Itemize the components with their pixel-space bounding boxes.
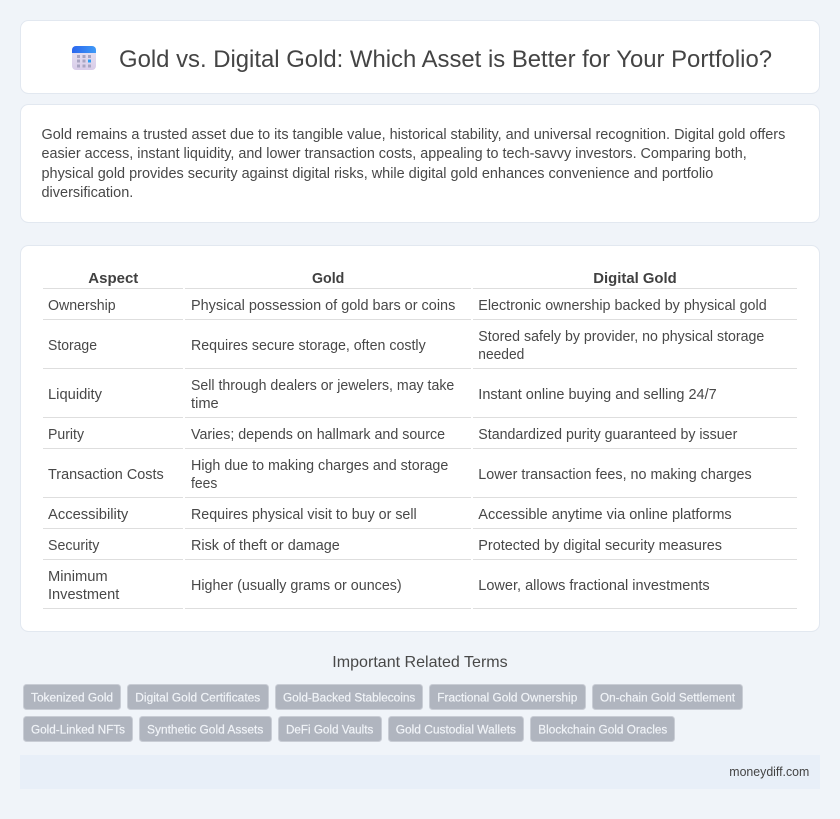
table header row: Digital Gold xyxy=(593,270,677,287)
tag: tokenized gold xyxy=(24,684,120,710)
tag: tokenized gold: Tokenized Gold xyxy=(31,690,113,704)
row: minimum investment xyxy=(48,569,710,603)
row: ownership: Physical possession of gold bars or coins xyxy=(191,298,455,314)
row: minimum investment: Lower, allows fractional investments xyxy=(478,578,710,594)
tag: gold-backed stablecoins: Gold-Backed Stablecoins xyxy=(283,690,415,704)
row: accessibility xyxy=(48,507,732,523)
row: security: Security xyxy=(48,538,100,554)
tag: digital gold certificates xyxy=(128,684,268,710)
row: transaction costs: High due to making charges and storage xyxy=(191,458,448,474)
footer source text: moneydiff.com xyxy=(729,765,809,779)
table header row: Gold xyxy=(312,270,344,287)
icon: calendar xyxy=(72,46,96,70)
row: storage xyxy=(48,329,764,363)
row: security: Risk of theft or damage xyxy=(191,538,340,554)
related terms tags xyxy=(24,684,742,742)
row: minimum investment: Higher (usually grams or ounces) xyxy=(191,578,402,594)
row: purity: Varies; depends on hallmark and source xyxy=(191,427,445,443)
row: liquidity xyxy=(48,378,717,412)
table header row xyxy=(88,270,677,287)
row: liquidity: Instant online buying and selling 24/7 xyxy=(478,387,717,403)
row: security xyxy=(48,538,722,554)
tag: on-chain gold settlement xyxy=(592,684,742,710)
heading: important related terms: Important Related Terms xyxy=(332,654,508,671)
row: accessibility: Accessibility xyxy=(48,507,129,523)
row: liquidity: time xyxy=(191,396,219,412)
tag: synthetic gold assets: Synthetic Gold Assets xyxy=(147,722,263,736)
panel: comparison table xyxy=(20,246,820,632)
tag: defi gold vaults xyxy=(278,716,382,742)
row: storage: needed xyxy=(478,347,524,363)
row: liquidity: Sell through dealers or jewelers, may take xyxy=(191,378,454,394)
intro paragraph: diversification. xyxy=(42,185,133,201)
tag: defi gold vaults: DeFi Gold Vaults xyxy=(286,722,373,736)
tag: fractional gold ownership xyxy=(430,684,586,710)
row: transaction costs: fees xyxy=(191,476,217,492)
row: security: Protected by digital security measures xyxy=(478,538,722,554)
row: purity: Purity xyxy=(48,427,85,443)
tag: gold custodial wallets xyxy=(388,716,524,742)
tag: blockchain gold oracles: Blockchain Gold Oracles xyxy=(538,722,667,736)
intro paragraph: easier access, instant liquidity, and lower transaction costs, appealing to tech-savvy investors. Comparing both, xyxy=(42,146,747,162)
row: storage: Requires secure storage, often costly xyxy=(191,338,426,354)
row: purity xyxy=(48,427,738,443)
row: accessibility: Accessible anytime via online platforms xyxy=(478,507,732,523)
panel: introduction xyxy=(20,104,820,222)
row: accessibility: Requires physical visit to buy or sell xyxy=(191,507,417,523)
intro paragraph xyxy=(42,127,785,201)
title: Gold vs. Digital Gold: Which Asset is Better for Your Portfolio? xyxy=(119,46,772,73)
row: ownership: Ownership xyxy=(48,298,116,314)
row: storage: Stored safely by provider, no physical storage xyxy=(478,329,764,345)
row: transaction costs: Lower transaction fees, no making charges xyxy=(478,467,752,483)
row: transaction costs xyxy=(48,458,752,492)
table header row: Aspect xyxy=(88,270,138,287)
row: storage: Storage xyxy=(48,338,97,354)
tag: fractional gold ownership: Fractional Gold Ownership xyxy=(437,690,577,704)
row: minimum investment: Minimum xyxy=(48,569,108,585)
row: ownership xyxy=(48,298,767,314)
row: transaction costs: Transaction Costs xyxy=(48,467,164,483)
panel: title card xyxy=(20,20,820,94)
row: ownership: Electronic ownership backed by physical gold xyxy=(478,298,767,314)
row: minimum investment: Investment xyxy=(48,587,119,603)
tag: on-chain gold settlement: On-chain Gold Settlement xyxy=(600,690,736,704)
intro paragraph: physical gold provides security against digital risks, while digital gold enhances convenience and portfolio xyxy=(42,166,713,182)
row: liquidity: Liquidity xyxy=(48,387,103,403)
tag: digital gold certificates: Digital Gold Certificates xyxy=(135,690,260,704)
tag: synthetic gold assets xyxy=(140,716,272,742)
footer bar xyxy=(20,755,820,789)
tag: gold-linked nfts xyxy=(24,716,132,742)
tag: gold-linked nfts: Gold-Linked NFTs xyxy=(31,722,125,736)
tag: gold-backed stablecoins xyxy=(276,684,422,710)
tag: blockchain gold oracles xyxy=(530,716,674,742)
intro paragraph: Gold remains a trusted asset due to its tangible value, historical stability, and universal recognition. Digital gold offers xyxy=(42,127,785,143)
row: purity: Standardized purity guaranteed by issuer xyxy=(478,427,738,443)
tag: gold custodial wallets: Gold Custodial Wallets xyxy=(396,722,516,736)
